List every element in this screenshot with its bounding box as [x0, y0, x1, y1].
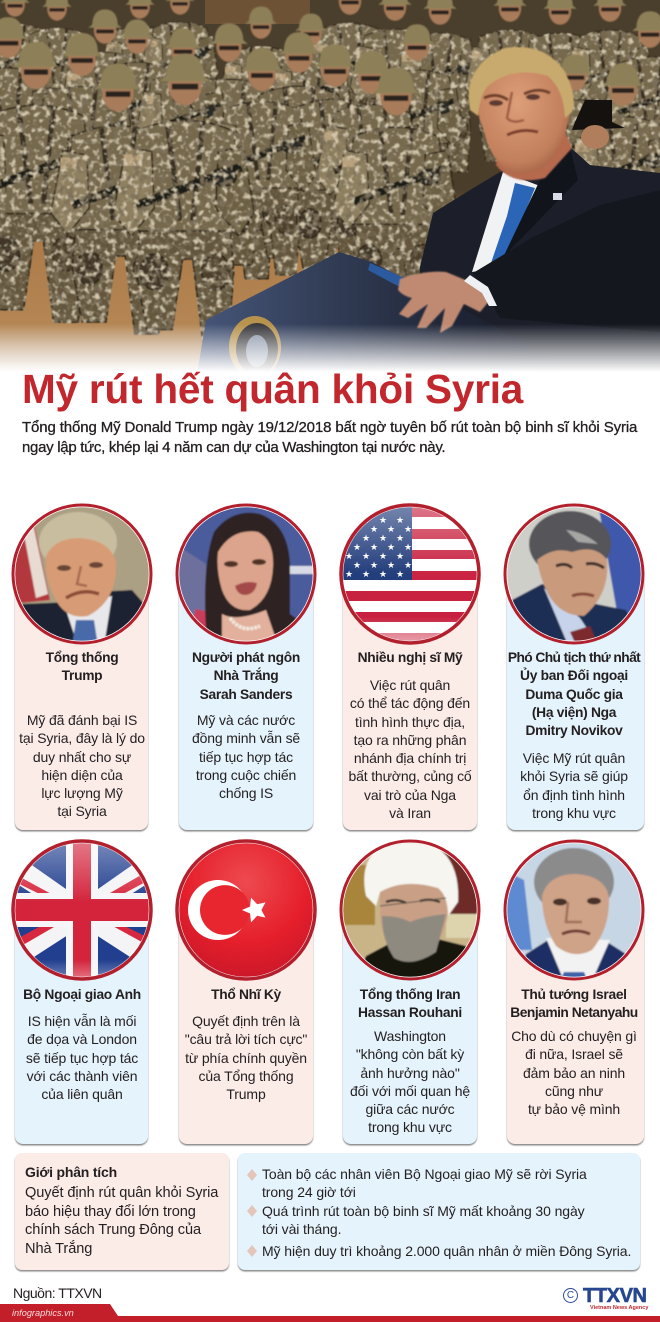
heading	[46, 650, 118, 683]
statement: có thể tác động đến	[350, 695, 470, 711]
statement: giữa các nước	[365, 1101, 454, 1117]
heading: Bộ Ngoại giao Anh	[23, 987, 141, 1002]
statement: và Iran	[389, 805, 431, 821]
statement: tại Syria, đây là lý do	[19, 730, 145, 746]
statement: tình hình thực địa,	[355, 714, 465, 730]
heading: Thủ tướng Israel	[521, 987, 627, 1002]
statement: khỏi Syria sẽ giúp	[520, 768, 628, 784]
statement: bất thường, củng cố	[348, 768, 472, 784]
icon: US flag: ★	[387, 525, 395, 535]
statement: IS hiện vẫn là mối	[28, 1013, 136, 1029]
jacket back	[420, 147, 660, 380]
icon: Turkey flag	[175, 839, 317, 981]
card: Benjamin Netanyahu	[504, 840, 645, 1146]
statement: đồng minh vẫn sẽ	[192, 730, 300, 746]
heading	[358, 987, 462, 1020]
statement: của Tổng thống	[199, 1068, 293, 1084]
icon: US flag: ★	[362, 516, 370, 526]
panel: analysts	[15, 1153, 229, 1270]
statement	[192, 712, 300, 801]
shirt	[472, 172, 540, 272]
heading: Phó Chủ tịch thứ nhất	[508, 650, 640, 665]
portrait: Hassan Rouhani	[340, 840, 480, 980]
card: Dmitry Novikov	[504, 504, 645, 832]
statement: sẽ tiếp tục hợp tác	[26, 1050, 138, 1066]
analysts text	[25, 1185, 218, 1256]
card: Sarah Sanders	[176, 504, 316, 832]
statement: tại Syria	[57, 803, 107, 819]
logo: TTXVN	[563, 1285, 648, 1311]
statement	[520, 750, 628, 821]
icon: US flag: ★	[370, 543, 378, 553]
icon: US flag: ★	[404, 525, 412, 535]
fact 1	[262, 1166, 587, 1200]
icon: US flag: ★	[370, 561, 378, 571]
fact 2: Quá trình rút toàn bộ binh sĩ Mỹ mất khoảng 30 ngày	[262, 1203, 585, 1219]
icon: US flag: ★	[387, 561, 395, 571]
heading: Thổ Nhĩ Kỳ	[211, 987, 281, 1002]
heading: (Hạ viện) Nga	[532, 705, 616, 720]
agency tagline: Vietnam News Agency	[590, 1305, 648, 1311]
portrait: Dmitry Novikov	[504, 504, 644, 644]
heading: Người phát ngôn	[192, 650, 300, 665]
head	[469, 47, 574, 180]
statement: Washington	[374, 1028, 446, 1044]
fact 1: trong 24 giờ tới	[262, 1184, 356, 1200]
copyright mark: C	[567, 1290, 574, 1301]
heading: Giới phân tích: Giới phân tích	[25, 1164, 117, 1180]
portrait: Trump	[12, 504, 152, 644]
statement	[185, 1013, 307, 1102]
portrait: Sarah Sanders	[176, 504, 316, 644]
statement: của liên quân	[41, 1086, 123, 1102]
icon: US flag: ★	[379, 516, 387, 526]
statement	[511, 1028, 637, 1117]
statement: tự bảo vệ mình	[528, 1101, 620, 1117]
icon: US flag: ★	[387, 543, 395, 553]
icon: US flag: ★	[370, 525, 378, 535]
heading: Dmitry Novikov	[525, 723, 622, 738]
title: Mỹ rút hết quân khỏi Syria	[22, 366, 523, 412]
heading	[508, 650, 641, 738]
statement: tạo ra những phân	[354, 732, 466, 748]
statement: Trump	[226, 1086, 266, 1102]
statement	[348, 677, 472, 821]
card: Thổ Nhĩ Kỳ	[175, 839, 317, 1146]
heading	[192, 650, 300, 702]
card: Bộ Ngoại giao Anh	[11, 839, 153, 1146]
icon: US flag: ★	[396, 534, 404, 544]
wordmark: TTXVN	[583, 1285, 647, 1307]
statement: Việc rút quân	[370, 677, 450, 693]
statement: với các thành viên	[27, 1068, 137, 1084]
heading: Tổng thống	[46, 650, 118, 665]
heading: Hassan Rouhani	[358, 1005, 462, 1020]
heading: Benjamin Netanyahu	[510, 1005, 638, 1020]
analysts text: báo hiệu thay đổi lớn trong	[25, 1204, 196, 1220]
analysts text: chính sách Trung Đông của	[25, 1222, 201, 1238]
icon: US flag	[339, 503, 481, 645]
icon: US flag: ★	[404, 543, 412, 553]
icon: US flag: ★	[396, 570, 404, 580]
card: Tổng thống Trump	[12, 504, 152, 832]
statement: đối với mối quan hệ	[350, 1083, 470, 1099]
statement: nhánh địa chính trị	[354, 750, 466, 766]
icon: US flag: ★	[345, 552, 353, 562]
icon: US flag: ★	[379, 534, 387, 544]
statement: "không còn bất kỳ	[356, 1046, 464, 1062]
statement	[26, 1013, 138, 1102]
statement: từ phía chính quyền	[185, 1050, 307, 1066]
heading: Sarah Sanders	[200, 687, 292, 702]
card: Hassan Rouhani	[340, 840, 480, 1146]
icon: US flag: ★	[362, 552, 370, 562]
copyright mark	[563, 1288, 578, 1303]
icon: US flag: ★	[362, 570, 370, 580]
heading: Trump	[62, 668, 102, 683]
heading: Nhà Trắng	[214, 668, 278, 683]
sleeve	[473, 190, 660, 332]
analysts text: Nhà Trắng	[25, 1240, 92, 1256]
statement: tiếp tục hợp tác	[199, 749, 293, 765]
lapel	[498, 147, 578, 268]
statement: trong cuộc chiến	[196, 767, 296, 783]
statement	[350, 1028, 470, 1135]
statement: trong khu vực	[532, 805, 616, 821]
heading: Duma Quốc gia	[525, 687, 623, 702]
statement: Mỹ đã đánh bại IS	[27, 712, 137, 728]
hand	[398, 272, 490, 333]
analysts text: Quyết định rút quân khỏi Syria	[25, 1185, 218, 1201]
intro text	[22, 419, 638, 456]
fact 2: tới vài tháng.	[262, 1220, 341, 1236]
heading: Nhiều nghị sĩ Mỹ	[358, 650, 462, 665]
statement: ảnh hưởng nào"	[360, 1065, 460, 1081]
bullets	[247, 1169, 257, 1257]
statement: đảm bảo an ninh	[523, 1065, 625, 1081]
footer bar	[0, 1304, 660, 1322]
statement: Quyết định trên là	[192, 1013, 300, 1029]
card: Nhiều nghị sĩ Mỹ	[339, 503, 481, 832]
intro text: Tổng thống Mỹ Donald Trump ngày 19/12/2018 bất ngờ tuyên bố rút toàn bộ binh sĩ khỏi Syria	[22, 419, 637, 436]
icon: US flag: ★	[396, 552, 404, 562]
heading: Tổng thống Iran	[360, 987, 460, 1002]
statement: "câu trả lời tích cực"	[185, 1031, 307, 1047]
hero photo: soldiers, Trump at podium	[0, 0, 660, 370]
fact 1: Toàn bộ các nhân viên Bộ Ngoại giao Mỹ sẽ rời Syria	[262, 1166, 587, 1182]
statement: hiện diện của	[41, 767, 123, 783]
icon: US flag: ★	[404, 561, 412, 571]
footer site name: infographics.vn	[12, 1308, 74, 1318]
portrait: Benjamin Netanyahu	[504, 840, 644, 980]
statement: ổn định tình hình	[523, 787, 625, 803]
icon: US flag: ★	[345, 570, 353, 580]
source: Nguồn: TTXVN	[13, 1285, 102, 1301]
fact 2	[262, 1203, 585, 1237]
statement: đi nữa, Israel sẽ	[525, 1046, 623, 1062]
soldier heads	[0, 0, 660, 116]
statement: trong khu vực	[368, 1119, 452, 1135]
icon: US flag: ★	[379, 552, 387, 562]
statement: cũng như	[545, 1083, 603, 1099]
black hat soldier	[572, 100, 625, 130]
bottom fade to white	[0, 324, 660, 372]
heading: Ủy ban Đối ngoại	[520, 668, 628, 683]
statement: Việc Mỹ rút quân	[523, 750, 625, 766]
tie	[491, 183, 535, 264]
podium seal	[229, 316, 281, 378]
statement: vai trò của Nga	[364, 787, 456, 803]
panel: key facts	[238, 1153, 640, 1270]
fact 3: Mỹ hiện duy trì khoảng 2.000 quân nhân ở miền Đông Syria.	[262, 1243, 631, 1259]
podium	[196, 252, 570, 380]
statement: lực lượng Mỹ	[41, 785, 123, 801]
icon: UK flag	[11, 839, 153, 981]
heading	[510, 987, 638, 1020]
statement: đe dọa và London	[27, 1031, 137, 1047]
icon: US flag: ★	[362, 534, 370, 544]
statement: Cho dù có chuyện gì	[511, 1028, 637, 1044]
icon: US flag: ★	[396, 516, 404, 526]
icon: US flag: ★	[353, 543, 361, 553]
statement: Mỹ và các nước	[197, 712, 295, 728]
statement	[19, 712, 145, 819]
intro text: ngay lập tức, khép lại 4 năm can dự của Washington tại nước này.	[22, 439, 445, 456]
statement: chống IS	[219, 785, 273, 801]
icon: US flag: ★	[379, 570, 387, 580]
statement: duy nhất cho sự	[33, 749, 131, 765]
icon: US flag: ★	[353, 561, 361, 571]
